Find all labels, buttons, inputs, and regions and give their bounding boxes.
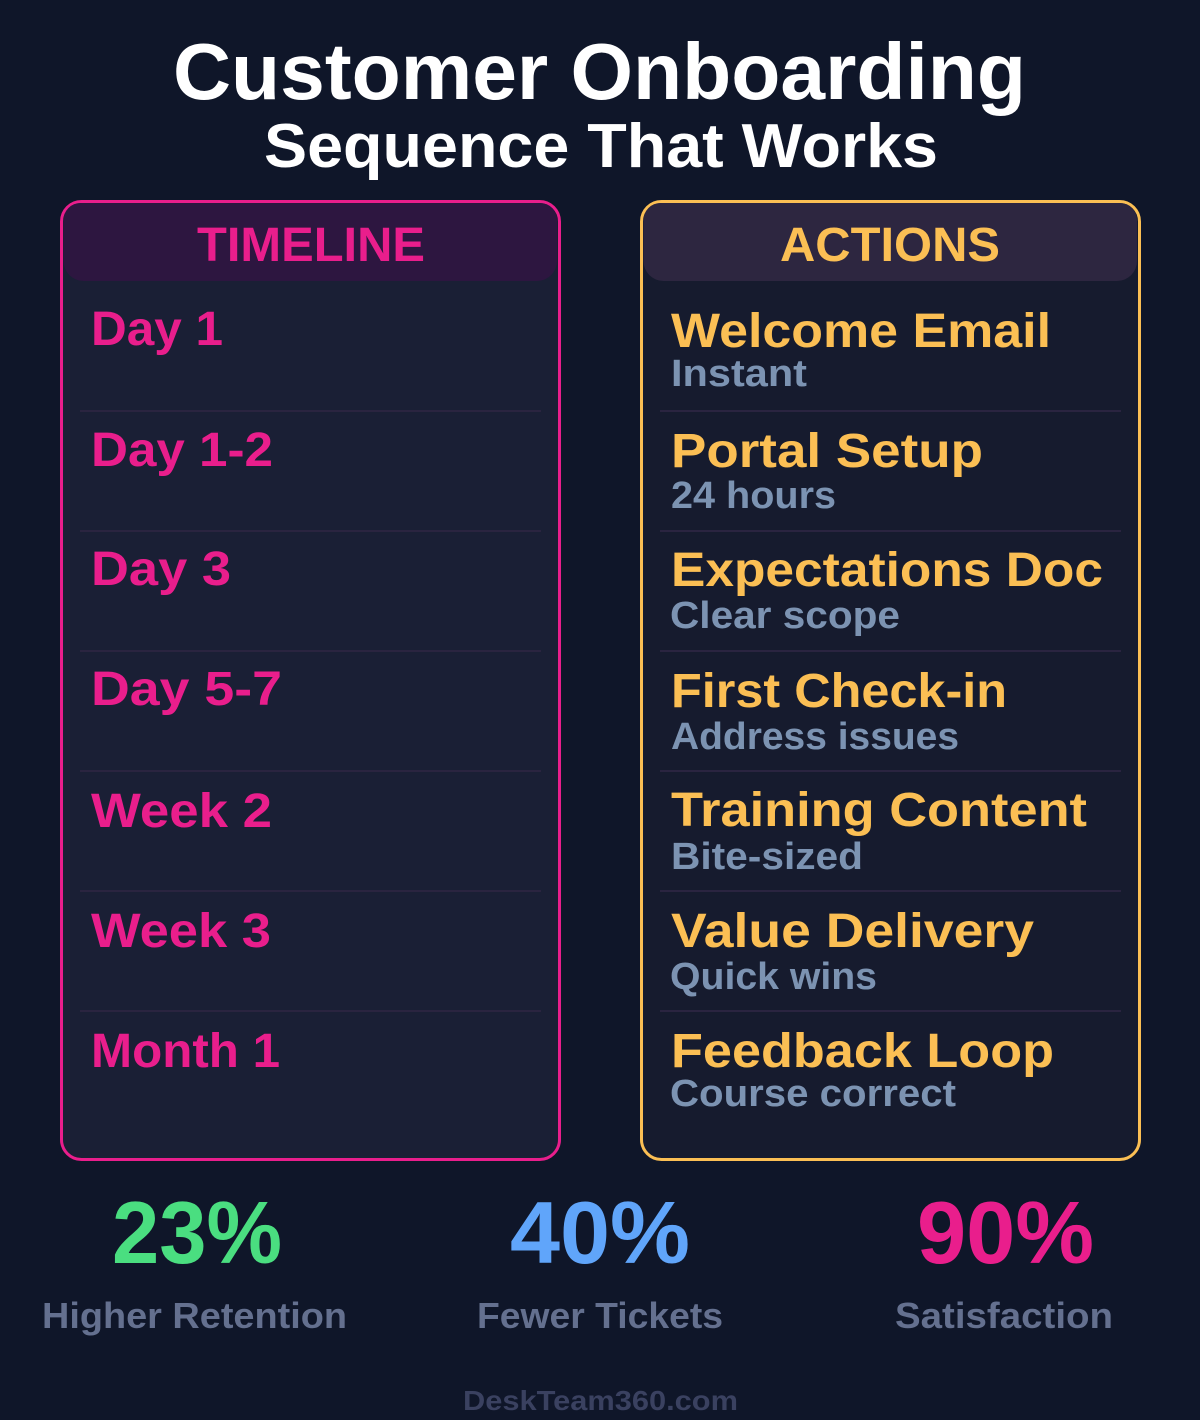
- timeline header band: TIMELINE: [197, 219, 425, 272]
- actions header band: ACTIONS: [780, 219, 1000, 272]
- title: [173, 27, 1026, 181]
- panel: timeline: [62, 202, 560, 1160]
- timeline rows: [80, 303, 541, 1078]
- actions rows: Quick wins: [670, 956, 877, 998]
- actions rows: Course correct: [670, 1073, 956, 1115]
- timeline header band: [64, 203, 557, 281]
- stat: fewer tickets: [477, 1183, 723, 1336]
- timeline rows: Day 3: [91, 543, 231, 596]
- actions rows: Bite-sized: [671, 836, 863, 878]
- actions rows: Address issues: [671, 716, 959, 758]
- stat: higher retention: Higher Retention: [42, 1295, 347, 1336]
- title: Sequence That Works: [264, 112, 938, 181]
- title: Customer Onboarding: [173, 27, 1026, 116]
- actions rows: 24 hours: [671, 475, 836, 517]
- stat: satisfaction: 90%: [917, 1183, 1094, 1282]
- timeline rows: Day 1-2: [91, 424, 273, 477]
- timeline rows: Week 3: [91, 905, 271, 958]
- stat: satisfaction: [895, 1183, 1113, 1336]
- stat: higher retention: 23%: [112, 1183, 282, 1282]
- stat: fewer tickets: 40%: [510, 1183, 690, 1282]
- actions rows: Feedback Loop: [671, 1025, 1054, 1078]
- actions header band: [644, 203, 1137, 281]
- actions rows: Clear scope: [670, 595, 900, 637]
- timeline rows: Week 2: [91, 785, 272, 838]
- footer brand: DeskTeam360.com: [463, 1385, 738, 1416]
- actions rows: Value Delivery: [671, 905, 1034, 958]
- actions rows: Expectations Doc: [671, 544, 1103, 597]
- actions rows: Instant: [671, 353, 807, 395]
- timeline rows: Month 1: [91, 1025, 280, 1078]
- actions rows: First Check-in: [671, 665, 1007, 718]
- stat: satisfaction: Satisfaction: [895, 1295, 1113, 1336]
- actions rows: Welcome Email: [671, 305, 1051, 358]
- actions rows: Portal Setup: [671, 425, 983, 478]
- stat: fewer tickets: Fewer Tickets: [477, 1295, 723, 1336]
- actions rows: Training Content: [671, 784, 1087, 837]
- timeline rows: Day 1: [91, 303, 223, 356]
- stat: higher retention: [42, 1183, 347, 1336]
- panel: actions: [642, 202, 1140, 1160]
- timeline rows: Day 5-7: [91, 663, 282, 716]
- actions rows: [660, 305, 1121, 1115]
